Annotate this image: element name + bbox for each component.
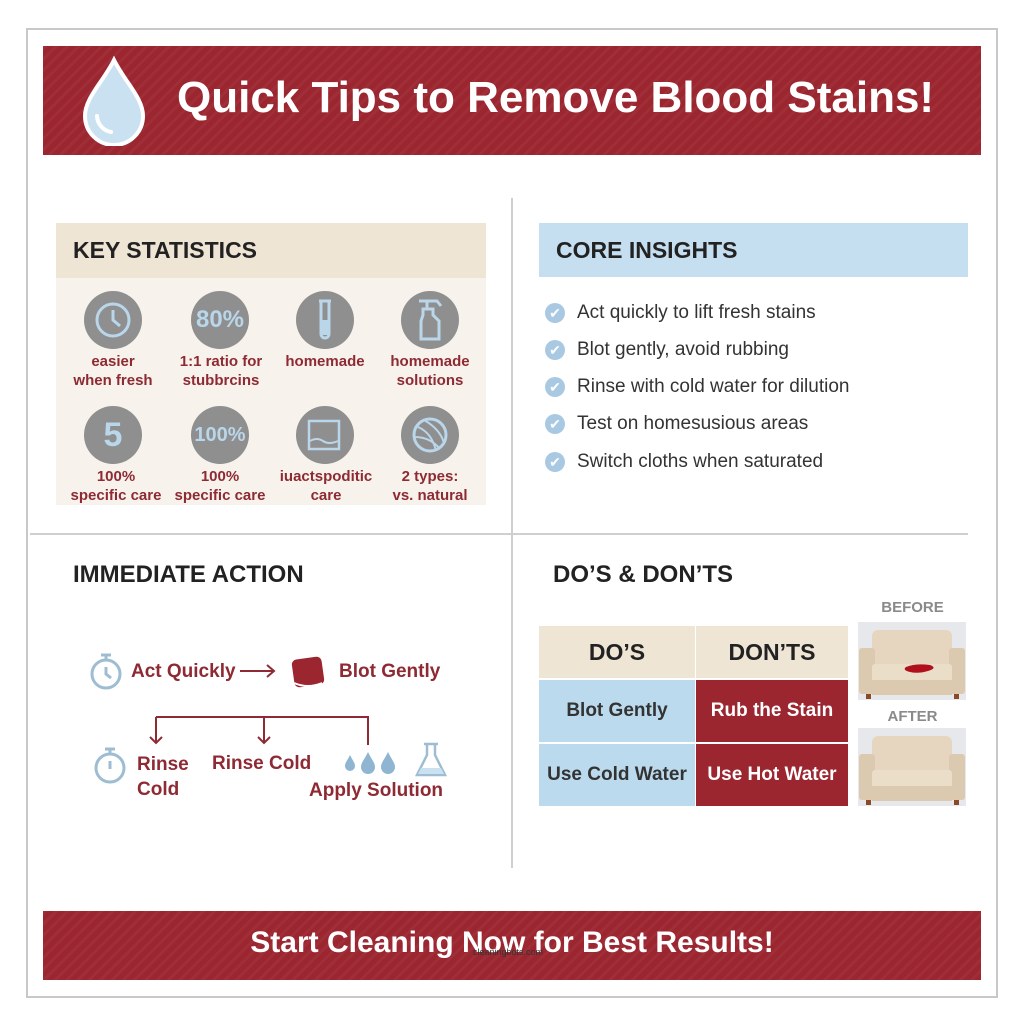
text: 100% bbox=[201, 468, 239, 485]
text: care bbox=[311, 487, 341, 504]
stat: 5 bbox=[84, 406, 142, 464]
text: solutions bbox=[397, 372, 463, 389]
text: when fresh bbox=[73, 372, 153, 389]
flow diagram: Cold bbox=[137, 779, 179, 800]
core insights list: ✔ bbox=[549, 342, 561, 358]
stat: 80% bbox=[191, 291, 249, 349]
before after images bbox=[858, 599, 966, 806]
flow diagram: Act Quickly bbox=[131, 661, 236, 682]
stat: 100% bbox=[191, 406, 249, 464]
core insights list: Rinse with cold water for dilution bbox=[577, 376, 849, 397]
core insights list: ✔ bbox=[549, 379, 561, 395]
flow diagram: Blot Gently bbox=[339, 661, 440, 682]
flow diagram: Rinse bbox=[137, 754, 189, 775]
flow diagram: Apply Solution bbox=[309, 780, 443, 801]
flow diagram: Rinse Cold bbox=[212, 753, 311, 774]
core insights list: ✔ bbox=[549, 305, 561, 321]
core insights list: Test on homesusious areas bbox=[577, 413, 808, 434]
icon: stopwatch 2 bbox=[94, 748, 126, 784]
table: dos and donts: Rub the Stain bbox=[711, 700, 833, 721]
text: homemade bbox=[390, 353, 470, 370]
text: 100% bbox=[97, 468, 135, 485]
text: stubbrcins bbox=[183, 372, 259, 389]
branching arrows bbox=[149, 716, 369, 745]
title banner bbox=[43, 46, 981, 155]
footer banner bbox=[43, 911, 981, 980]
icon: stopwatch bbox=[90, 654, 122, 690]
stat: 100%: 100% bbox=[194, 424, 246, 446]
stat icons bbox=[84, 291, 459, 768]
icon: test tube bbox=[296, 291, 354, 349]
heading: core insights bbox=[539, 223, 968, 277]
icon: fabric bbox=[296, 406, 354, 464]
before after images: BEFORE bbox=[881, 599, 944, 616]
text: 1:1 ratio for bbox=[180, 353, 262, 370]
footer banner: Start Cleaning Now for Best Results! bbox=[250, 926, 774, 959]
icon: drops bbox=[345, 752, 395, 774]
text: vs. natural bbox=[392, 487, 468, 504]
heading: core insights: CORE INSIGHTS bbox=[556, 237, 737, 263]
heading: dos and donts: DO’S & DON’TS bbox=[553, 561, 733, 588]
icon: cloth bbox=[292, 656, 324, 688]
text: iuactspoditic bbox=[280, 468, 372, 485]
core insights list bbox=[545, 302, 849, 472]
table: dos and donts: Blot Gently bbox=[566, 700, 668, 721]
stat: 5: 5 bbox=[104, 416, 122, 454]
core insights list: Blot gently, avoid rubbing bbox=[577, 339, 789, 360]
stat labels bbox=[71, 353, 470, 504]
arrow bbox=[240, 664, 276, 678]
icon: clock bbox=[84, 291, 142, 349]
text: homemade bbox=[285, 353, 365, 370]
table: dos and donts: Use Cold Water bbox=[547, 764, 687, 785]
text: specific care bbox=[175, 487, 265, 504]
heading: key statistics bbox=[56, 223, 486, 278]
text: easier bbox=[91, 353, 135, 370]
footer banner: cleaningbots.com bbox=[473, 947, 543, 957]
table: dos and donts: DON’TS bbox=[729, 638, 815, 664]
core insights list: Switch cloths when saturated bbox=[577, 451, 823, 472]
table: dos and donts bbox=[539, 626, 848, 806]
core insights list: ✔ bbox=[549, 416, 561, 432]
text: 2 types: bbox=[402, 468, 458, 485]
heading: key statistics: KEY STATISTICS bbox=[73, 237, 257, 263]
core insights list: ✔ bbox=[549, 454, 561, 470]
heading: immediate action: IMMEDIATE ACTION bbox=[73, 561, 304, 588]
dividers bbox=[511, 198, 513, 868]
table: dos and donts: DO’S bbox=[589, 638, 645, 664]
icon: flask bbox=[415, 742, 447, 776]
icon: water drop bbox=[83, 56, 145, 146]
table: dos and donts: Use Hot Water bbox=[707, 764, 837, 785]
title text: Quick Tips to Remove Blood Stains! bbox=[177, 73, 934, 122]
stat: 80%: 80% bbox=[196, 306, 244, 333]
before after images: AFTER bbox=[888, 708, 938, 725]
core insights list: Act quickly to lift fresh stains bbox=[577, 302, 816, 323]
panel: key statistics bbox=[56, 223, 486, 505]
text: specific care bbox=[71, 487, 161, 504]
icon: yarn bbox=[401, 406, 459, 464]
icon: spray bottle bbox=[401, 291, 459, 349]
flow diagram bbox=[90, 654, 447, 801]
